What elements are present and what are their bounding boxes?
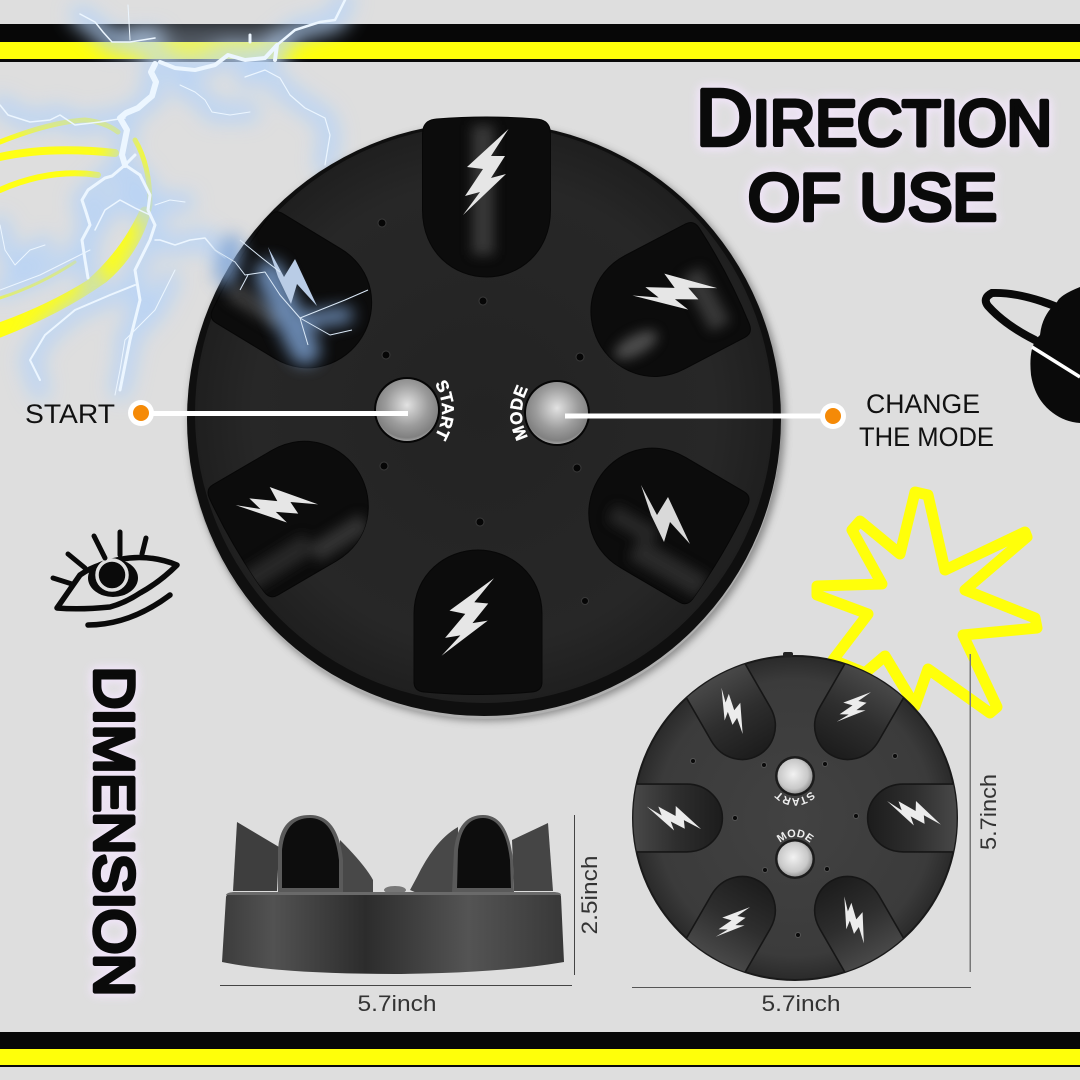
callout: start [25, 399, 408, 429]
title: OF USE [748, 160, 997, 234]
callout: change the mode [565, 389, 994, 452]
buttons [775, 756, 815, 879]
title: DIRECTION [696, 73, 1052, 162]
icon: eye [53, 532, 177, 625]
dimension: side width: 5.7inch [358, 991, 436, 1016]
left finger arch [278, 815, 343, 893]
bolts [647, 686, 941, 943]
top plate [633, 656, 957, 980]
yellow rings [0, 120, 150, 335]
lightning bolts on fingers [236, 129, 717, 660]
side view device [222, 815, 564, 974]
START printed label: START [436, 380, 454, 442]
power nub [783, 652, 793, 657]
screw holes [690, 754, 898, 938]
right arch wing [410, 827, 458, 893]
device shadow [189, 125, 785, 721]
icon: yellow star [817, 492, 1037, 713]
lightning effect [0, 0, 345, 395]
callout: start: START [25, 399, 115, 429]
left arch wing [340, 840, 373, 893]
small top view device [632, 652, 958, 981]
title [696, 73, 1052, 234]
finger highlights [225, 125, 730, 598]
MODE button [524, 380, 590, 446]
heading: dimension: DIMENSION [83, 667, 146, 996]
screw holes [378, 219, 588, 604]
dimension: side height: 2.5inch [577, 856, 602, 934]
right finger arch [452, 815, 514, 893]
START button [374, 377, 440, 443]
main device [154, 116, 826, 726]
MODE printed label: MODE [510, 384, 528, 441]
outer right wedge [512, 823, 553, 891]
bolt under lightning [268, 247, 317, 306]
top band [0, 24, 1080, 62]
dimension: top height: 5.7inch [976, 774, 1001, 850]
outer left wedge [233, 822, 279, 891]
bottom band [0, 1032, 1080, 1067]
callout: change the mode: CHANGE [866, 389, 980, 419]
finger slots [202, 117, 756, 694]
device top plate [195, 125, 773, 703]
rim [226, 892, 561, 895]
callout: change the mode: THE MODE [859, 422, 994, 452]
finger slots [631, 659, 959, 977]
blue glow on finger [225, 245, 345, 350]
lightning strands on finger [215, 240, 368, 345]
device rim [187, 125, 781, 719]
START printed label: START [774, 792, 814, 806]
center button top [384, 886, 406, 894]
dimension: top width: 5.7inch [762, 991, 840, 1016]
MODE printed label: MODE [776, 829, 814, 843]
icon: planet [986, 287, 1080, 423]
base cylinder [222, 892, 564, 974]
